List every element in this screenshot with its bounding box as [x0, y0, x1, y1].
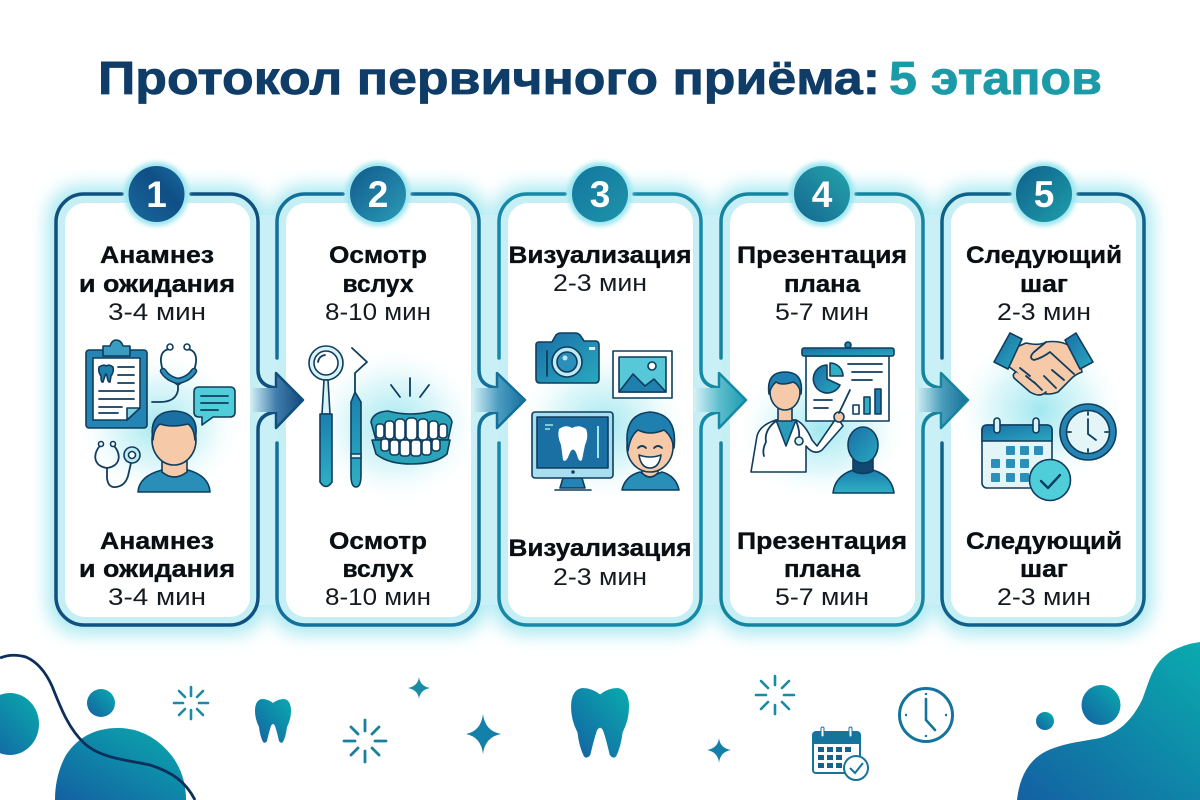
icon glow 2: [307, 345, 483, 505]
decor: large star: [466, 714, 501, 754]
decor: small star: [408, 677, 430, 699]
arrow 1 to 2: [250, 373, 303, 428]
bottom text 4: [737, 528, 907, 611]
card outline 4: [721, 194, 941, 625]
badge 4: [790, 162, 854, 226]
top text 4: Презентация: [737, 242, 907, 269]
decor: small tooth: [255, 699, 291, 743]
icon: calendar: [982, 418, 1070, 500]
icon: handshake: [994, 333, 1093, 395]
bottom text 4: Презентация: [737, 528, 907, 555]
decor: clock: [900, 688, 952, 742]
gaps between cards: [257, 215, 943, 605]
card outline 3: [499, 194, 719, 625]
badge 2: [346, 162, 410, 226]
top text 1: 3-4 мин: [108, 299, 206, 326]
badge 1: 1: [146, 174, 167, 215]
top text 1: Анамнез: [100, 242, 214, 269]
title: Протокол первичного приёма:: [98, 52, 880, 104]
badge 1: [124, 162, 188, 226]
panel: step 1: [56, 162, 276, 625]
icon: stethoscope: [152, 344, 196, 402]
icon: monitor: [532, 412, 613, 490]
badge 4: 4: [812, 174, 833, 215]
bottom text 1: и ожидания: [79, 556, 235, 583]
panel: step 4: [721, 162, 941, 625]
icon: back-view patient: [833, 427, 894, 493]
icon glow 3: [515, 347, 691, 503]
icon: small stethoscope: [95, 442, 140, 487]
badge 3: [568, 162, 632, 226]
icon: dental probe: [351, 348, 367, 487]
top text 5: [966, 242, 1122, 326]
bottom text 1: Анамнез: [100, 528, 214, 555]
bottom text 1: [79, 528, 235, 611]
top text 3: Визуализация: [508, 242, 692, 269]
arrow 4 to 5: [916, 373, 968, 428]
top text 3: 2-3 мин: [553, 270, 647, 297]
card glow background: [48, 186, 1152, 634]
bottom text 4: 5-7 мин: [775, 584, 869, 611]
icon: clock: [1060, 404, 1116, 460]
top text 5: 2-3 мин: [997, 299, 1091, 326]
arrow 3 to 4: [694, 373, 746, 428]
bottom text 3: [508, 535, 692, 591]
bottom text 2: 8-10 мин: [325, 584, 431, 611]
title: [98, 52, 1102, 104]
icon: picture: [613, 351, 672, 398]
icon glow 4: [734, 358, 910, 502]
bottom text 1: 3-4 мин: [108, 584, 206, 611]
decor: star 3: [707, 738, 731, 763]
icon: clipboard: [86, 340, 147, 428]
icon: patient: [138, 411, 210, 492]
bottom text 5: шаг: [1020, 556, 1068, 583]
bottom text 2: [325, 528, 431, 611]
top text 3: [508, 242, 692, 297]
decor: right blob: [1017, 642, 1200, 800]
bottom text 5: [966, 528, 1122, 611]
panel: step 5: [942, 162, 1144, 625]
bottom text 5: Следующий: [966, 528, 1122, 555]
icon glow 5: [952, 332, 1128, 488]
icon: camera: [536, 333, 599, 383]
top text 4: [737, 242, 907, 326]
decor: sparkle 3: [756, 676, 794, 714]
top text 5: шаг: [1020, 271, 1068, 298]
panel: step 2: [277, 162, 497, 625]
top text 2: Осмотр: [329, 242, 427, 269]
icon: dentures: [371, 378, 452, 464]
icon: presentation board: [802, 342, 894, 421]
icon: smiling patient: [622, 412, 679, 490]
top text 1: и ожидания: [79, 271, 235, 298]
bottom text 5: 2-3 мин: [997, 584, 1091, 611]
badge 5: [1012, 162, 1076, 226]
decor: left blobs: [0, 655, 195, 800]
card outline 2: [277, 194, 497, 625]
top text 2: вслух: [342, 271, 414, 298]
arrow 2 to 3: [472, 373, 525, 428]
bottom text 2: Осмотр: [329, 528, 427, 555]
top text 5: Следующий: [966, 242, 1122, 269]
decor: calendar: [813, 727, 868, 780]
decor: large tooth: [571, 688, 629, 758]
decor: sparkle 1: [174, 687, 208, 719]
icon glow 1: [75, 350, 245, 500]
title: 5 этапов: [889, 52, 1102, 104]
top text 2: 8-10 мин: [325, 299, 431, 326]
panel: step 3: [499, 162, 719, 625]
top text 2: [325, 242, 431, 326]
top text 4: 5-7 мин: [775, 299, 869, 326]
icon: dental mirror: [309, 346, 343, 486]
top text 1: [79, 242, 235, 326]
card outline 1: [56, 194, 276, 625]
bottom text 3: Визуализация: [508, 535, 692, 562]
badge 3: 3: [590, 174, 610, 215]
decor: sparkle 2: [344, 720, 386, 762]
badge 2: 2: [368, 174, 388, 215]
top text 4: плана: [784, 271, 861, 298]
card outline 5: [942, 194, 1144, 625]
icon: doctor: [751, 372, 850, 472]
bottom text 3: 2-3 мин: [553, 564, 647, 591]
bottom text 4: плана: [784, 556, 861, 583]
badge 5: 5: [1034, 174, 1054, 215]
icon: speech bubble: [194, 387, 235, 425]
bottom text 2: вслух: [342, 556, 414, 583]
